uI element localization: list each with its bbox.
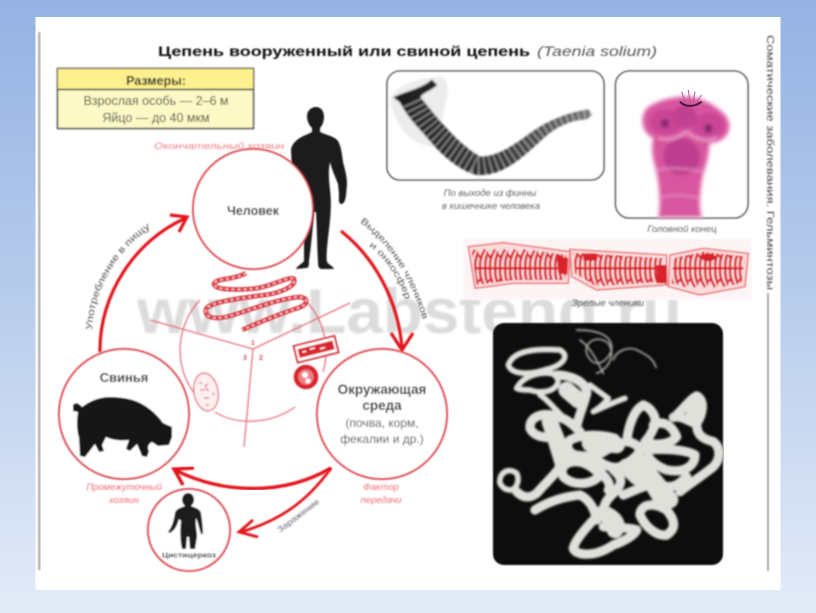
title xyxy=(158,44,657,59)
icon: pig xyxy=(73,397,172,457)
label: intermediate host: Промежуточный xyxy=(86,482,163,493)
central life-cycle diagram xyxy=(150,273,350,447)
arrow label: shedding of segments: Выделение члеников xyxy=(360,217,428,320)
node: environment circle: фекалии и др.) xyxy=(340,432,424,446)
side rule xyxy=(767,293,769,571)
node: pig circle xyxy=(59,349,189,479)
icon: human torso xyxy=(168,493,203,549)
arrow label: food consumption: Употребление в пищу xyxy=(84,223,150,330)
stage numbers: 3 xyxy=(243,355,247,362)
label: intermediate host xyxy=(86,482,163,506)
node: environment circle: (почва, корм, xyxy=(345,416,419,430)
left margin rule xyxy=(38,32,40,570)
caption: after leaving the cyst: в кишечнике человека xyxy=(442,201,540,212)
arrow: food consumption xyxy=(100,215,187,352)
photo: mature proglottids xyxy=(463,238,752,300)
caption: after leaving the cyst: По выходе из финны xyxy=(444,188,536,199)
caption: head end: Головной конец xyxy=(647,224,717,235)
arrow: environment to human cysticercosis xyxy=(239,468,331,537)
size box: Яйцо — до 40 мкм xyxy=(102,111,210,125)
size box: Размеры: xyxy=(126,74,186,88)
arrow label: shedding of segments: и онкосфер xyxy=(369,242,410,300)
photo: whole worm on black xyxy=(493,323,723,565)
node: cysticercosis circle: Цистицеркоз xyxy=(162,552,217,560)
label: transmission factor: Фактор xyxy=(363,482,399,493)
size box xyxy=(58,68,254,128)
node: cysticercosis circle xyxy=(148,489,230,571)
arrow: environment to pig xyxy=(174,468,331,489)
label: transmission factor: передачи xyxy=(360,495,402,506)
arrow label: infection: Заражение xyxy=(275,496,321,535)
label: intermediate host: хозяин xyxy=(108,495,140,506)
title: (Taenia solium) xyxy=(537,44,657,59)
adult worm coils xyxy=(206,273,306,330)
node: human circle xyxy=(193,149,313,269)
photo panel: scolex xyxy=(616,71,748,218)
arrow: shedding of segments xyxy=(341,231,413,350)
node: pig circle: Свинья xyxy=(100,370,148,385)
photo panel: worm leaving the cyst xyxy=(387,71,604,180)
node: environment circle xyxy=(317,349,447,479)
caption: mature segments: Зрелые членики xyxy=(572,298,645,309)
node: human circle: Человек xyxy=(227,204,280,218)
watermark: www.Labstend.ru xyxy=(136,277,682,347)
title: Цепень вооруженный или свиной цепень xyxy=(158,44,530,59)
cysticercus xyxy=(191,371,221,413)
egg xyxy=(296,367,316,387)
size box: Взрослая особь — 2–6 м xyxy=(83,94,229,108)
label: definitive host: Окончательный хозяин xyxy=(154,141,284,151)
node: environment circle: среда xyxy=(362,398,402,413)
gravid segment xyxy=(294,336,339,363)
icon: human silhouette xyxy=(291,107,347,269)
tangled strobila xyxy=(500,349,719,554)
stage numbers: 1 xyxy=(251,340,255,347)
section side label: Соматические заболевания. Гельминтозы xyxy=(764,35,776,290)
caption: after leaving the cyst xyxy=(442,188,540,212)
stage numbers: 2 xyxy=(259,355,263,362)
label: transmission factor xyxy=(360,482,402,506)
hooks of the scolex xyxy=(680,90,702,106)
stage numbers xyxy=(243,340,263,362)
node: environment circle: Окружающая xyxy=(338,382,426,397)
